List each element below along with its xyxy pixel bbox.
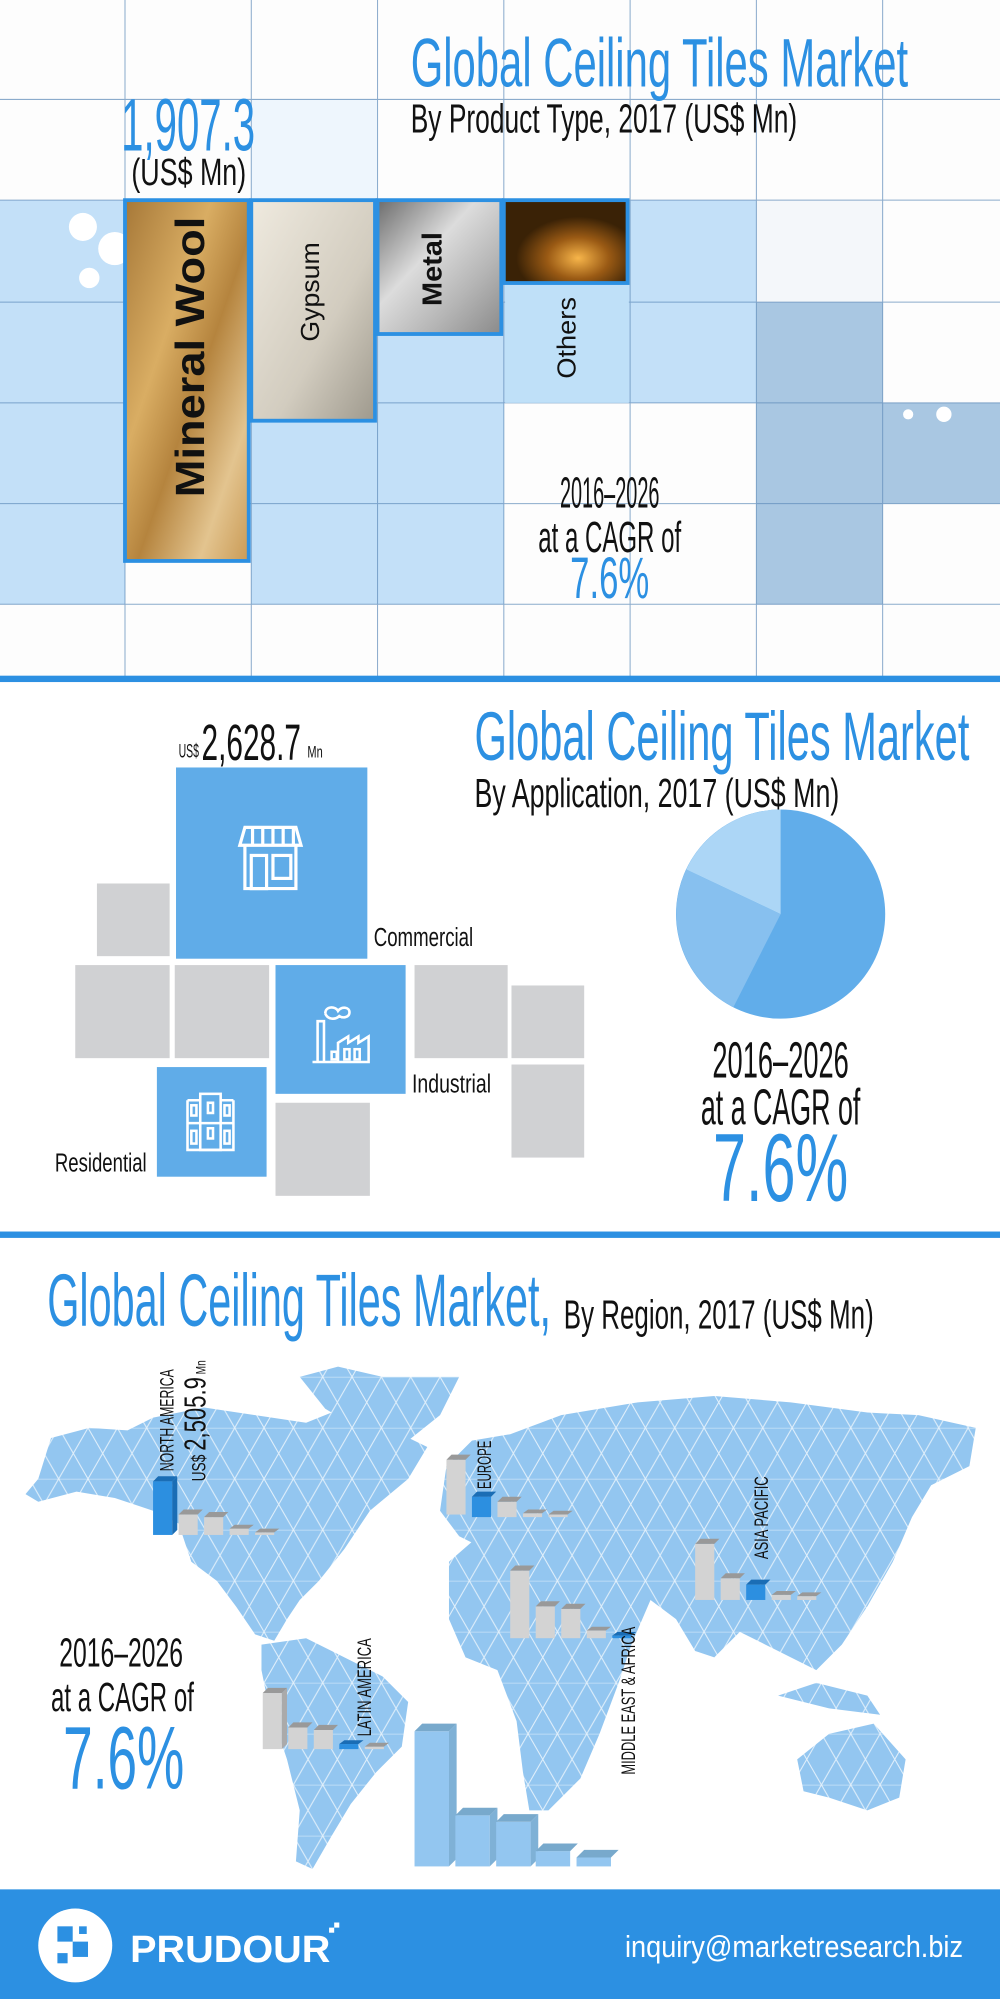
chart: asia pacific	[695, 1476, 821, 1600]
cagr: region: 7.6%	[63, 1708, 184, 1808]
value: 1,907.3	[121, 83, 255, 194]
bar: others: Others	[553, 297, 581, 379]
value: 2,628.7	[179, 714, 323, 771]
chart: middle east africa	[510, 1566, 640, 1775]
chart: north america: NORTH AMERICA	[157, 1369, 178, 1471]
cagr: application: 7.6%	[713, 1113, 848, 1222]
icon: factory	[312, 1007, 369, 1062]
icon: store	[240, 827, 301, 889]
value: 2,628.7: 2,628.7	[202, 714, 301, 771]
bar: gypsum: Gypsum	[297, 242, 325, 342]
title: application	[474, 698, 969, 816]
bar: gypsum	[251, 200, 375, 421]
cagr: application: at a CAGR of	[701, 1078, 861, 1135]
tile: residential	[157, 1067, 267, 1177]
tile: industrial	[276, 965, 406, 1094]
value: 2,628.7: US$	[179, 741, 199, 762]
label: residential: Residential	[55, 1150, 147, 1178]
chart: latin america	[263, 1638, 389, 1749]
pie chart	[676, 810, 885, 1019]
chart: asia pacific: ASIA PACIFIC	[752, 1476, 773, 1559]
chart: latin america: LATIN AMERICA	[355, 1638, 376, 1736]
tile: commercial	[176, 767, 367, 959]
bar: metal: Metal	[416, 232, 447, 306]
panel: product type	[0, 0, 1000, 678]
chart: north america	[153, 1360, 279, 1535]
bar: mineral wool: Mineral Wool	[167, 217, 213, 497]
cagr: region: at a CAGR of	[51, 1674, 194, 1720]
logo: PRUDOUR	[130, 1928, 330, 1971]
value: 2,628.7: Mn	[307, 742, 323, 761]
chart: europe: EUROPE	[475, 1441, 496, 1489]
title: product type: By Product Type, 2017 (US$ Mn)	[411, 96, 797, 142]
squares grid	[75, 883, 584, 1196]
email: inquiry@marketresearch.biz	[625, 1930, 963, 1964]
value: 1,907.3: 1,907.3	[121, 83, 255, 166]
logo	[38, 1908, 339, 1982]
chart: middle east africa: MIDDLE EAST & AFRICA	[619, 1627, 640, 1775]
footer	[0, 1889, 1000, 1999]
chart: europe	[446, 1441, 573, 1517]
cagr: product: 7.6%	[570, 546, 649, 611]
icon: building	[188, 1094, 233, 1150]
bar: mineral wool	[125, 200, 249, 561]
cagr: region: 2016–2026	[59, 1629, 183, 1675]
bar: metal	[378, 200, 501, 334]
cagr: product: 2016–2026	[560, 469, 659, 517]
cagr: region	[51, 1629, 194, 1808]
map	[26, 1367, 976, 1869]
label: industrial: Industrial	[412, 1071, 491, 1099]
title: product type	[411, 25, 908, 142]
cagr: application	[701, 1031, 861, 1222]
chart: north america: US$ 2,505.9 Mn	[178, 1360, 212, 1481]
cagr: application: 2016–2026	[712, 1031, 849, 1088]
title: region: Global Ceiling Tiles Market,	[47, 1259, 551, 1342]
cagr: product: at a CAGR of	[538, 514, 682, 562]
label: commercial: Commercial	[374, 924, 473, 952]
bar: others	[504, 200, 629, 403]
cagr: product	[538, 469, 682, 611]
chart: global bars	[415, 1724, 619, 1866]
value: 1,907.3: (US$ Mn)	[131, 151, 246, 194]
